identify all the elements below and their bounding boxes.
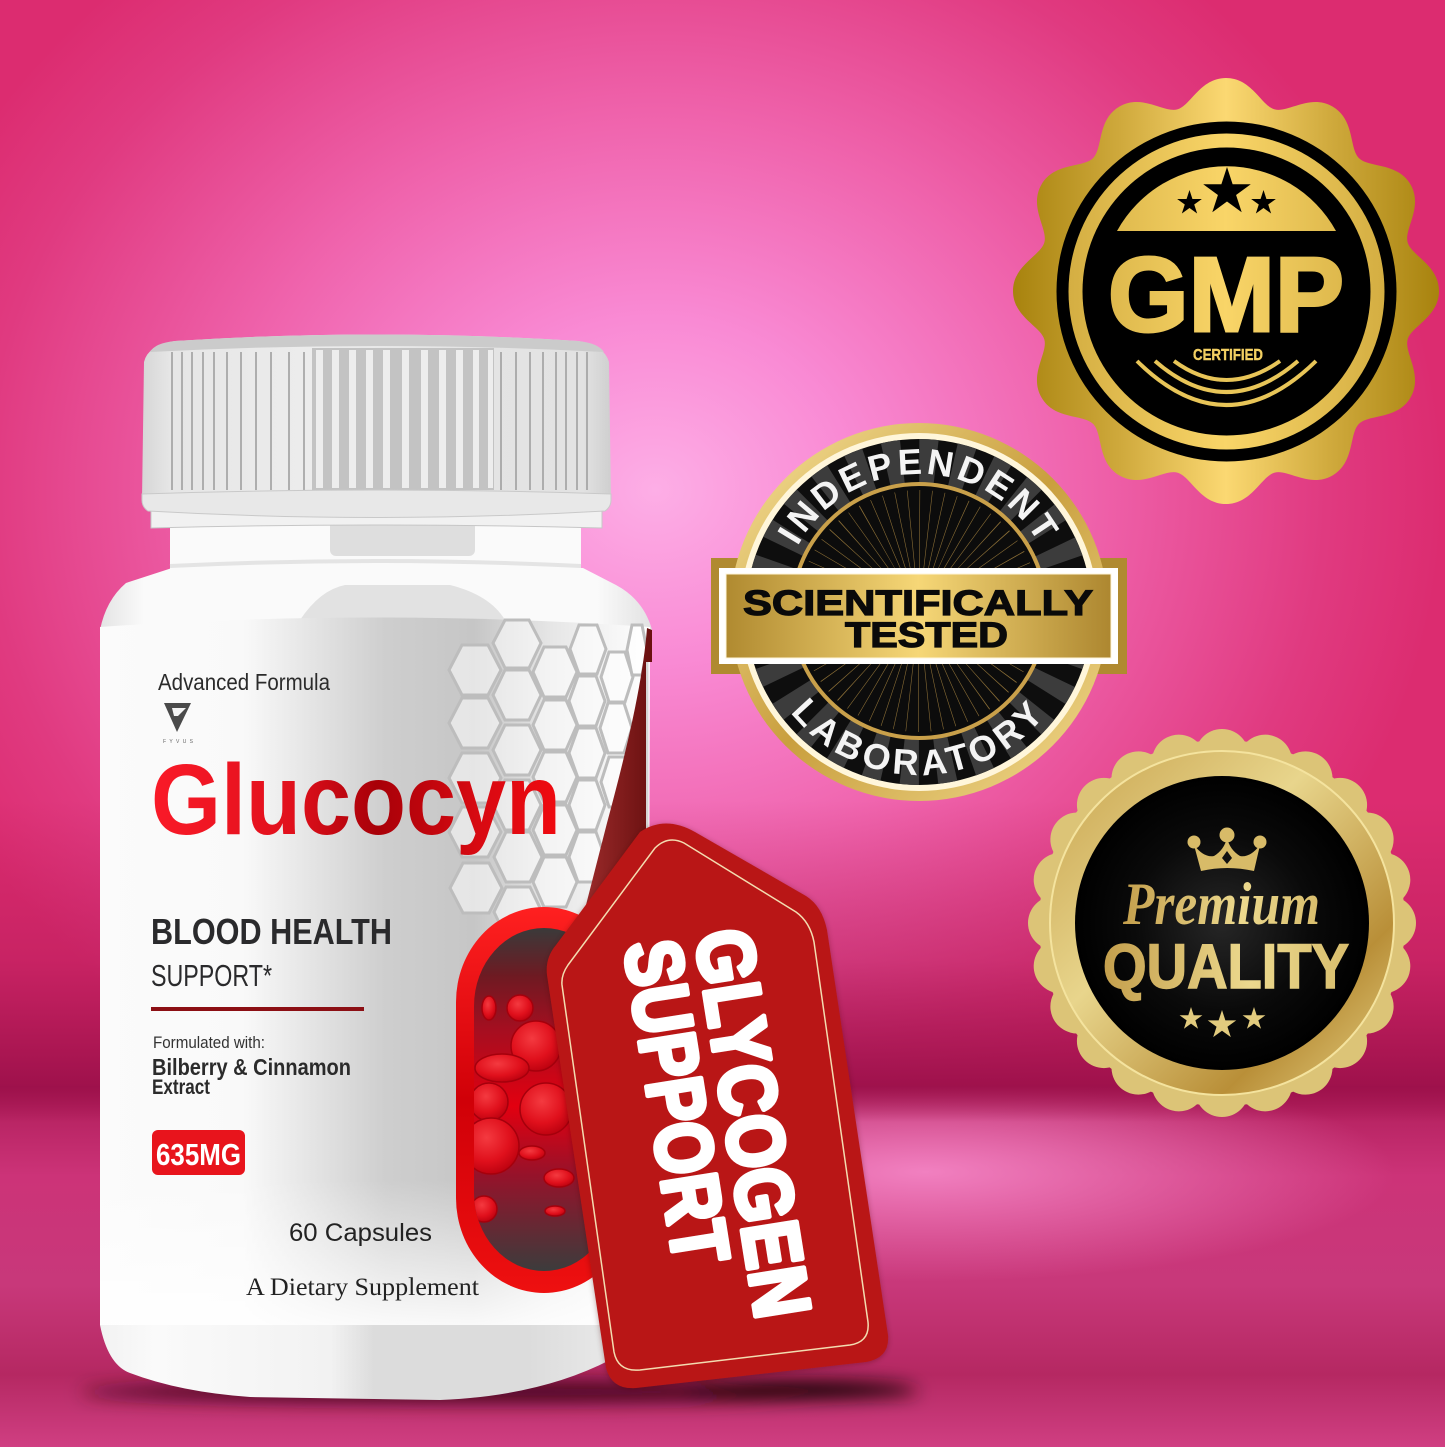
curved text: LABORATORY: LABORATORY: [792, 698, 1038, 776]
bottle edge line: [646, 662, 648, 832]
ribbon text: SCIENTIFICALLY: SCIENTIFICALLY: [743, 584, 1093, 623]
cap flange: [151, 508, 602, 528]
sunburst rays: [837, 529, 1001, 693]
product bottle: [100, 334, 652, 1400]
ring segments: [769, 462, 1069, 762]
divider: red rule: [151, 1007, 364, 1011]
label lower highlight: [100, 1180, 648, 1325]
gmp stars: [1177, 167, 1276, 214]
shoulder highlight: [300, 585, 505, 620]
text: Formulated with: Formulated with:: [153, 1034, 265, 1052]
text: Bilberry & Cinnamon: Bilberry & Cinnamon: [152, 1054, 351, 1080]
text: 60 Capsules: 60 Capsules: [289, 1219, 432, 1247]
cap centre shading: [312, 348, 494, 490]
capsule window with blood cells: [456, 907, 592, 1293]
premium stars: [1180, 1007, 1265, 1037]
gmp arcs: [1137, 361, 1316, 405]
hang tag: glycogen support: [547, 824, 888, 1388]
dosage badge: 635MG: [152, 1130, 245, 1175]
ribbon gold panel: [726, 574, 1111, 658]
product label background: [100, 618, 650, 1325]
bottle ground shadow: [80, 1381, 920, 1403]
badge: independent laboratory: [711, 423, 1127, 801]
white inner ring: [740, 433, 1098, 791]
background: pink studio wall: [0, 0, 1445, 1100]
product name: Glucocyn: Glucocyn: [151, 744, 561, 856]
gmp certified label: CERTIFIED: [1193, 347, 1263, 364]
gmp dome: [1117, 166, 1336, 231]
icon: brand logo: FYVUS: [163, 739, 194, 745]
background: studio floor: [0, 1086, 1445, 1447]
outer gold ring: [730, 423, 1108, 801]
cap side ribs: [172, 352, 587, 490]
ribbon back: [711, 558, 1127, 674]
dark ring: [746, 439, 1092, 785]
honeycomb pattern: [449, 620, 647, 937]
bottle body: [100, 627, 648, 1400]
red swoosh: [586, 628, 652, 905]
tag stitched outline: [562, 840, 868, 1370]
premium black center: [1075, 776, 1369, 1070]
text: Extract: Extract: [152, 1076, 210, 1099]
text: QUALITY: QUALITY: [1103, 932, 1349, 1002]
badge: GMP certified: [1013, 78, 1439, 504]
cap top rim: [150, 334, 604, 352]
dosage badge: 635MG: 635MG: [156, 1137, 241, 1172]
inner gold circle: [792, 484, 1046, 738]
bottle shoulder: [100, 568, 652, 630]
icon: brand logo: [163, 703, 194, 745]
ribbon white border: [719, 568, 1118, 664]
text: Advanced Formula: Advanced Formula: [158, 669, 330, 695]
text: BLOOD HEALTH: BLOOD HEALTH: [151, 911, 392, 952]
ribbon text: TESTED: TESTED: [845, 616, 1008, 655]
bottle neck: [170, 520, 581, 576]
curved text: INDEPENDENT: INDEPENDENT: [778, 449, 1060, 544]
tag text: GLYCOGEN: GLYCOGEN: [678, 923, 827, 1324]
premium scalloped edge: [1028, 729, 1416, 1117]
tag shape: [547, 824, 888, 1388]
badge: premium quality: [1028, 729, 1416, 1117]
bottle cap: [142, 334, 611, 528]
cap shell: [142, 334, 611, 518]
text: SUPPORT*: SUPPORT*: [151, 958, 272, 993]
premium gold ring: [1050, 751, 1394, 1095]
tag text: SUPPORT: SUPPORT: [607, 934, 746, 1270]
gmp rings: [1056, 122, 1396, 462]
icon: crown: [1188, 828, 1266, 871]
cap centre highlights: [316, 350, 493, 488]
text: A Dietary Supplement: A Dietary Supplement: [246, 1274, 479, 1301]
text: Premium: Premium: [1122, 871, 1320, 937]
gmp heading: GMP: [1108, 236, 1344, 354]
gmp seal edge: [1013, 78, 1439, 504]
cap lower band: [142, 490, 611, 518]
